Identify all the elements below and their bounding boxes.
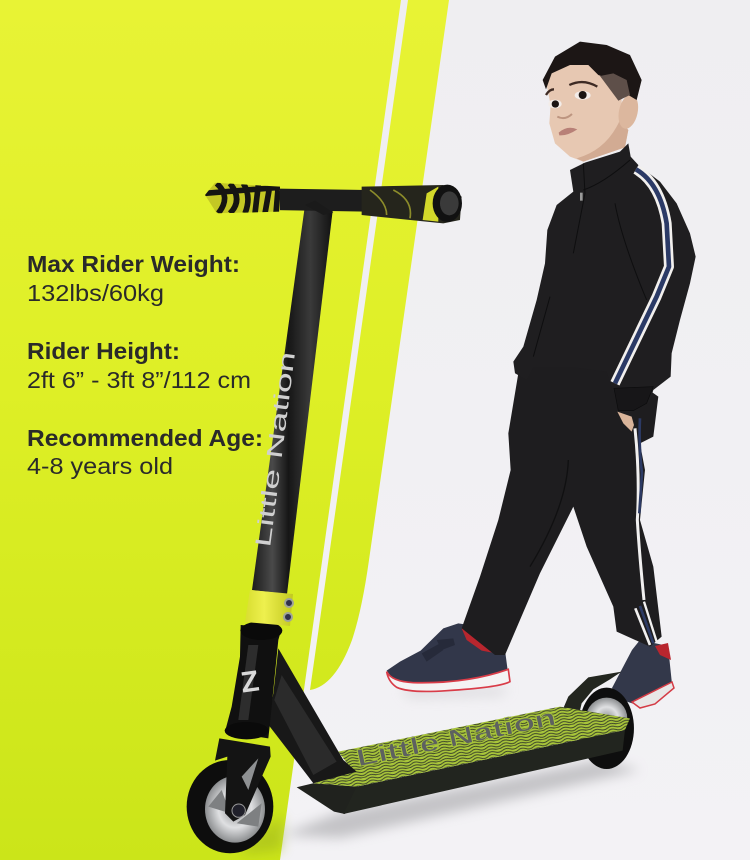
jacket sleeve stripes [615,169,669,383]
nose and mouth [557,114,572,118]
hair [543,42,642,101]
floor shadows [240,688,640,855]
handlebar [205,183,462,223]
grip tape deck with brand lettering: Little Nation [354,704,558,773]
lower head collar [225,722,269,739]
front wheel [187,760,273,853]
deck side [343,730,625,814]
neck and face [547,58,628,162]
neck shadow [577,120,628,162]
hand in pocket [617,412,634,432]
deck under fold [297,783,357,814]
panel: secondary yellow stripe [310,0,449,690]
right grip [362,185,462,223]
spec: rider height: Rider Height: [27,338,180,364]
ear [616,93,641,131]
left grip [205,183,280,213]
zip [580,193,583,201]
crossbar [263,188,367,212]
boy shoe: right foot [612,640,674,708]
scooter front wheel and fork [187,621,282,853]
stem with brand text [250,205,333,594]
down tube [267,648,357,783]
rear fender [558,672,622,725]
boy shoe: left foot [387,623,510,691]
panel: main yellow slanted area [0,0,401,860]
scooter rear wheel and deck [267,648,634,814]
eyebrows [546,82,597,95]
spec: max rider weight: Max Rider Weight: [27,251,240,277]
grip end cap [433,185,462,222]
clamp bolts [284,599,293,621]
spec: recommended age [27,425,263,479]
boy jacket [513,143,696,411]
spec: max rider weight: 132lbs/60kg [27,280,164,306]
fork [215,738,271,822]
spec: rider height [27,338,251,393]
boy figure [387,42,696,708]
spec: recommended age: 4-8 years old [27,453,173,479]
jacket cuff [614,387,653,411]
boy trousers [462,360,662,655]
trouser side stripe [635,418,657,645]
head tube [225,625,282,738]
boy head [543,42,642,162]
head tube collar [240,621,282,640]
brand Z logo: Z [239,664,261,700]
spec: recommended age: Recommended Age: [27,425,263,451]
stem with brand text: Little Nation [250,350,300,549]
scooter [187,183,634,853]
heading and specs text [27,251,263,479]
grip tape deck with brand lettering [313,704,630,787]
spec: max rider weight [27,251,240,306]
hair fade [600,73,630,101]
eyes [548,91,591,108]
rear wheel [558,672,634,769]
yellow clamp [245,590,293,626]
spec: rider height: 2ft 6” - 3ft 8”/112 cm [27,367,251,393]
